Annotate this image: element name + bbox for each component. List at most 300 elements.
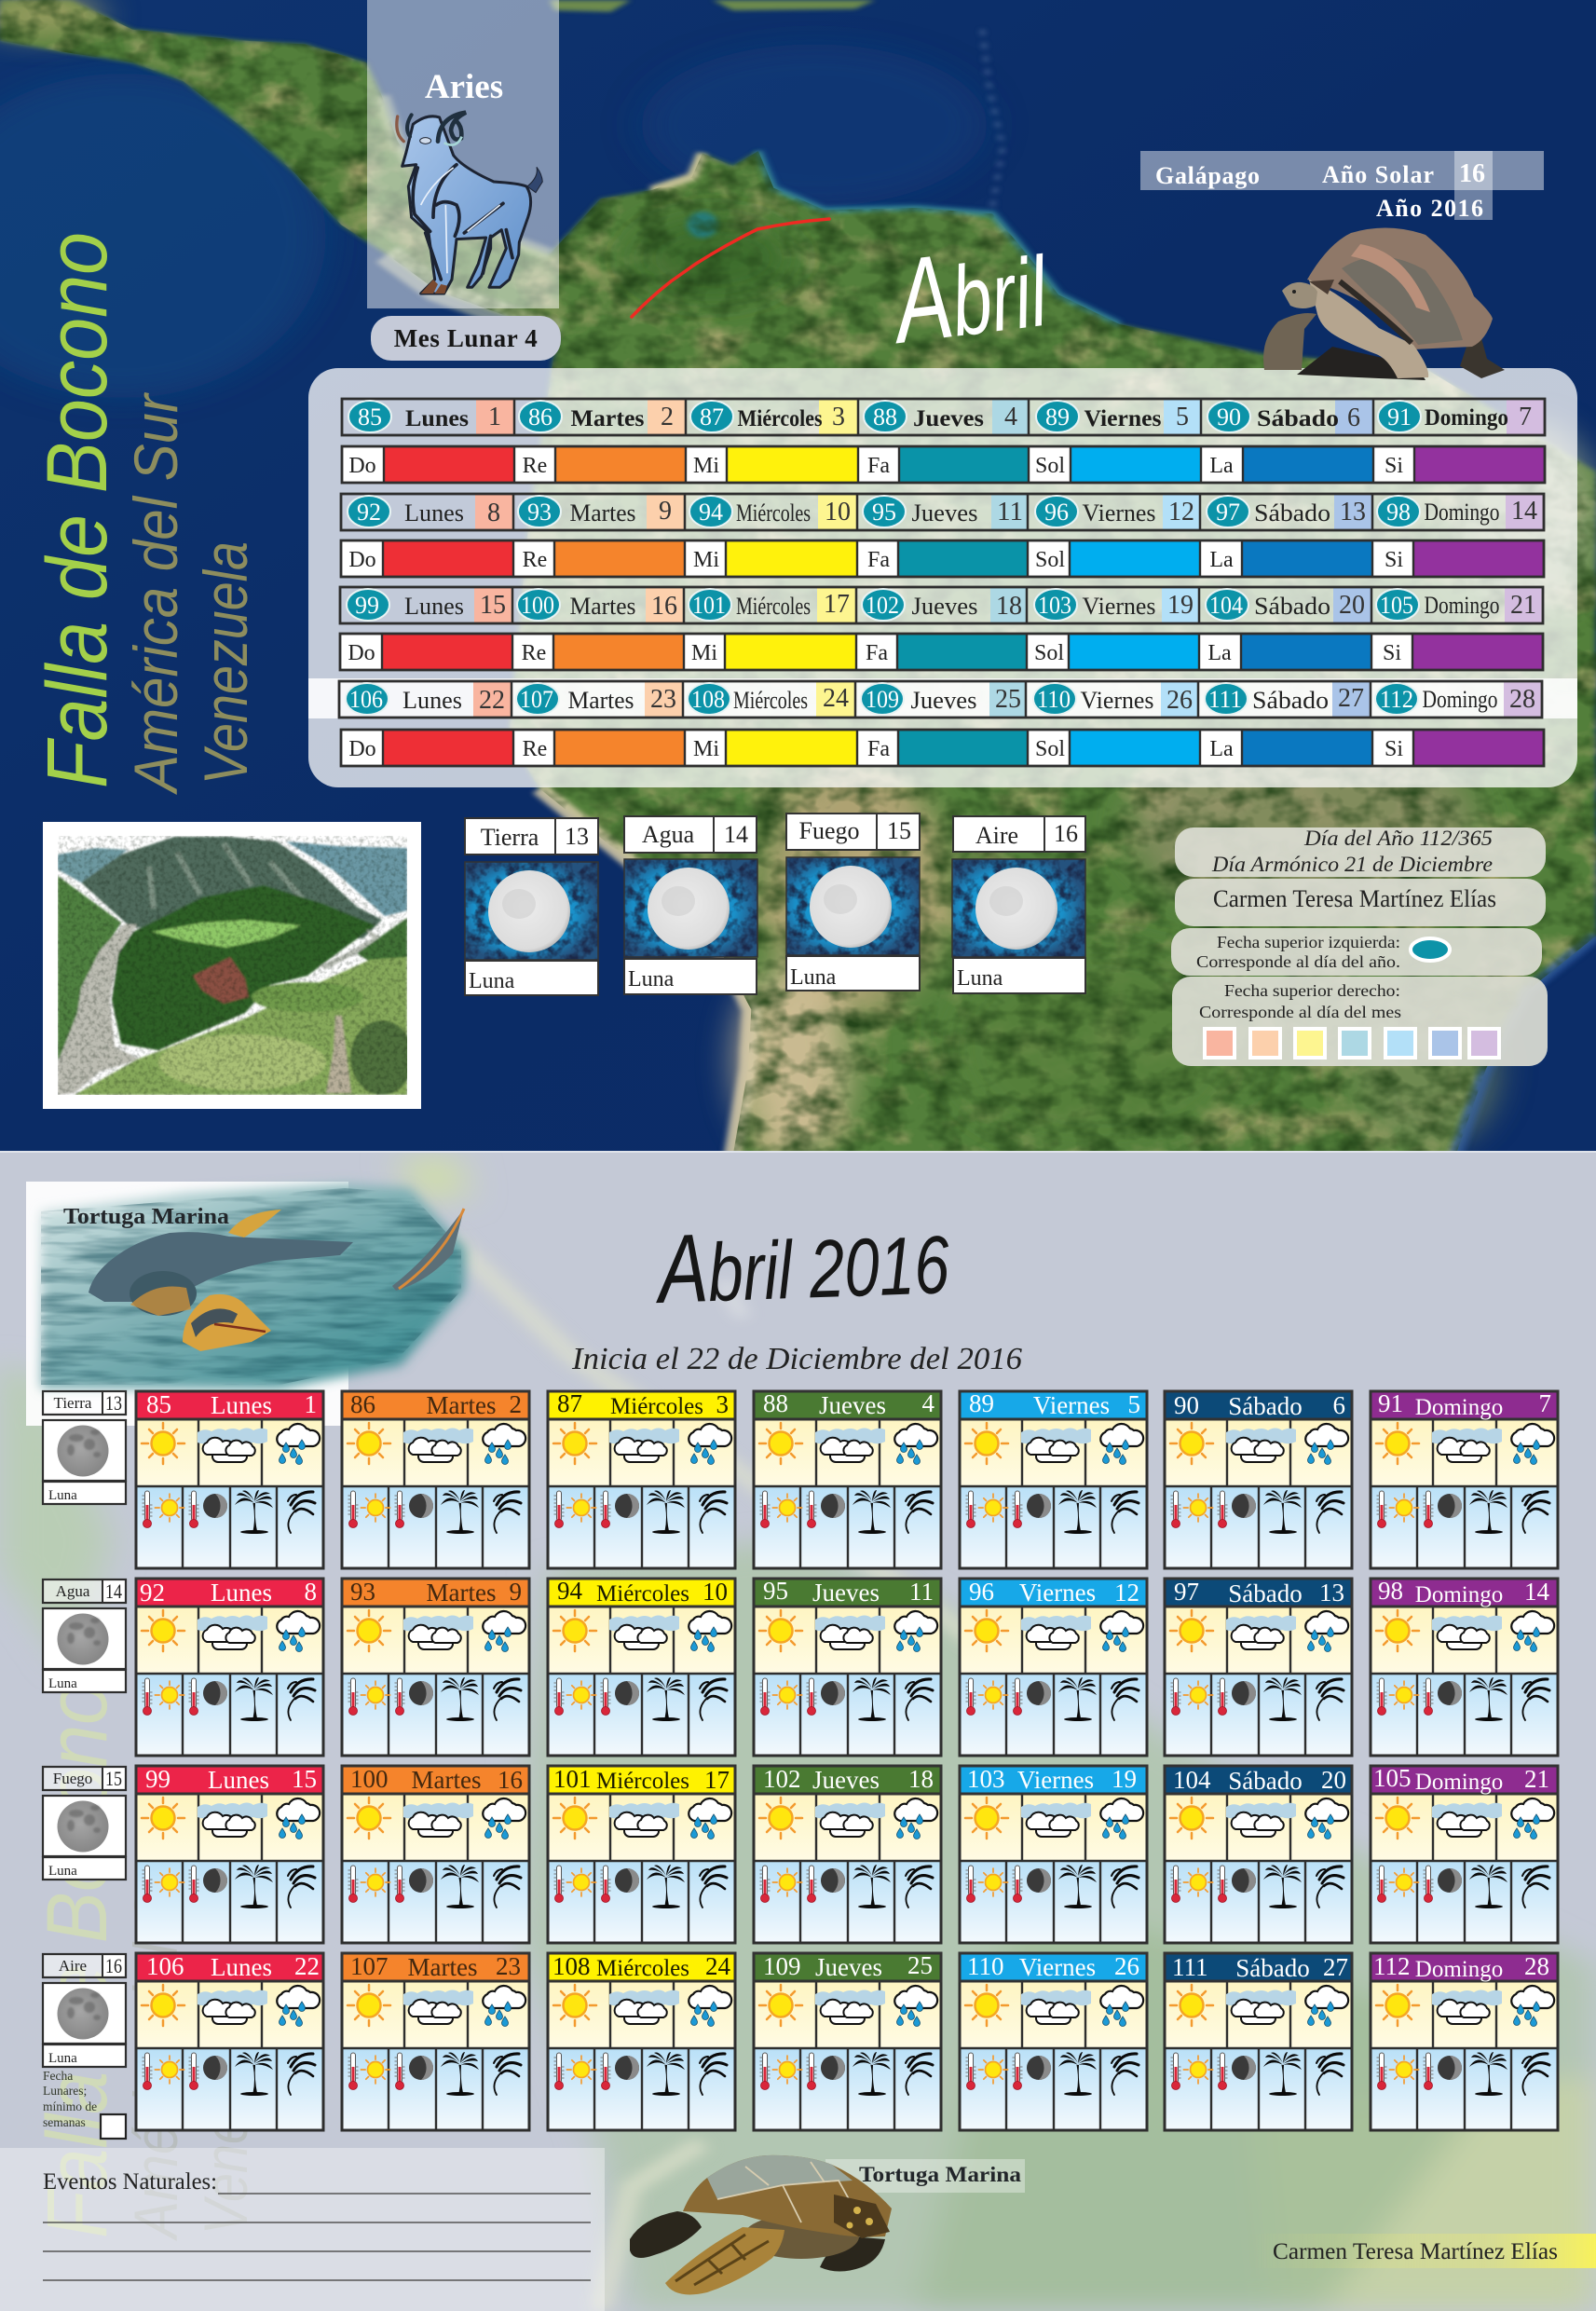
header: 112 Domingo 28: 112 bbox=[1373, 1952, 1411, 1980]
day card 91 bbox=[1371, 1389, 1558, 1568]
header: 101 Miércoles 17: Miércoles bbox=[596, 1769, 689, 1794]
week 1 date row: 91 bbox=[1387, 403, 1412, 431]
header: 105 Domingo 21: Domingo bbox=[1415, 1770, 1503, 1795]
header: 112 Domingo 28: Domingo bbox=[1415, 1957, 1503, 1982]
day card 103 bbox=[960, 1765, 1147, 1943]
week 3 note bars: Fa bbox=[866, 641, 888, 665]
day card 94 bbox=[548, 1577, 735, 1756]
moon card: Tierra 13: Tierra bbox=[481, 824, 539, 851]
header: 103 Viernes 19: Viernes bbox=[1017, 1766, 1094, 1794]
week 1 note bars: Si bbox=[1385, 454, 1403, 478]
week 3 date row: Sábado bbox=[1254, 593, 1330, 620]
moon card: Fuego 15: Luna bbox=[790, 965, 837, 990]
header: 96 Viernes 12: Viernes bbox=[1019, 1579, 1096, 1607]
week 3 date row: 99 bbox=[355, 592, 379, 619]
week 4 note bars: Sol bbox=[1035, 737, 1065, 761]
week 1 date row: Miércoles bbox=[738, 406, 823, 431]
week 2 date row: 11 bbox=[997, 498, 1023, 526]
week 2 note bars: Mi bbox=[693, 548, 719, 572]
week 2 note bars: Do bbox=[348, 548, 376, 572]
week 3 note bars: La bbox=[1207, 641, 1232, 665]
header: 106 Lunes 22 bbox=[136, 1952, 323, 1981]
week 4 note bars: Re bbox=[523, 737, 547, 761]
icon: Aries ram bbox=[397, 113, 542, 294]
day card 99 bbox=[136, 1765, 323, 1943]
week 1 date row: Jueves bbox=[913, 406, 984, 431]
week 4 note bars: Fa bbox=[867, 737, 890, 761]
week 3 date row: 18 bbox=[996, 592, 1022, 621]
note: Fecha Lunares checkbox: Fecha bbox=[43, 2069, 73, 2083]
header: 85 Lunes 1: 85 bbox=[146, 1390, 171, 1418]
side moon: Agua 14 bbox=[43, 1579, 126, 1692]
info: author name bbox=[1175, 879, 1546, 926]
header: 106 Lunes 22: 22 bbox=[294, 1952, 320, 1980]
moon card: Aire 16 bbox=[952, 816, 1085, 993]
header: 86 Martes 2: Martes bbox=[427, 1391, 496, 1419]
week 1 date row: Sábado bbox=[1257, 406, 1339, 431]
moon card: Agua 14 bbox=[624, 816, 757, 994]
header: 94 Miércoles 10: 94 bbox=[557, 1577, 583, 1605]
week 1 date row: 3 bbox=[832, 403, 845, 431]
week 3 date row: 101 bbox=[692, 592, 726, 619]
week 3 note bars: Si bbox=[1383, 641, 1401, 665]
week 1 date row: 1 bbox=[488, 403, 501, 431]
week 2 date row: 9 bbox=[659, 497, 672, 526]
moon card: Fuego 15: 15 bbox=[887, 817, 911, 844]
day card 97 bbox=[1165, 1578, 1352, 1756]
week 3 date row: 21 bbox=[1510, 591, 1536, 620]
week 2 note bars bbox=[341, 540, 1544, 577]
header: 111 Sábado 27 bbox=[1165, 1953, 1352, 1982]
week 4 date row: 110 bbox=[1037, 686, 1071, 713]
day card 106 bbox=[136, 1952, 323, 2130]
week 1 date row: 90 bbox=[1217, 403, 1241, 431]
moon card: Fuego 15 bbox=[786, 814, 920, 991]
week 4 note bars bbox=[341, 730, 1544, 766]
week 3 date row: 104 bbox=[1209, 592, 1243, 619]
header: 110 Viernes 26: Viernes bbox=[1019, 1953, 1096, 1981]
background: satellite map of the Americas bbox=[0, 0, 1596, 1157]
header: 87 Miércoles 3: 87 bbox=[557, 1389, 582, 1417]
icon: Galapagos giant tortoise bbox=[1263, 227, 1505, 380]
banner: Galápago / Año Solar / Año 2016 bbox=[1140, 151, 1544, 222]
side moon: Tierra 13: 13 bbox=[105, 1391, 122, 1415]
banner: Galápago / Año Solar / Año 2016: Galápago bbox=[1155, 162, 1260, 189]
week 3 date row: 100 bbox=[521, 592, 554, 619]
label: Tortuga Marina box bbox=[825, 2159, 1025, 2193]
week 4 date row bbox=[339, 681, 1542, 718]
note: Fecha Lunares checkbox bbox=[43, 2069, 126, 2139]
week 2 date row: 13 bbox=[1340, 498, 1366, 526]
header: 100 Martes 16: 16 bbox=[498, 1766, 523, 1794]
week 2 date row: Domingo bbox=[1424, 499, 1500, 526]
header: 98 Domingo 14 bbox=[1371, 1577, 1558, 1607]
header: 109 Jueves 25: 25 bbox=[907, 1951, 933, 1979]
week 2 note bars: Fa bbox=[867, 548, 890, 572]
header: 98 Domingo 14: Domingo bbox=[1415, 1582, 1503, 1607]
header: 91 Domingo 7: Domingo bbox=[1415, 1395, 1503, 1420]
label: Mes Lunar 4 bbox=[371, 316, 561, 361]
header: 103 Viernes 19: 103 bbox=[967, 1765, 1004, 1793]
side moon: Aire 16: Luna bbox=[48, 2051, 77, 2066]
side moon: Fuego 15: Fuego bbox=[53, 1770, 92, 1787]
week 2 note bars: Si bbox=[1385, 548, 1403, 572]
day card 89 bbox=[960, 1389, 1147, 1568]
legend: top right date swatches bbox=[1172, 977, 1548, 1066]
week 1 date row: Viernes bbox=[1084, 406, 1162, 431]
header: 109 Jueves 25: Jueves bbox=[815, 1953, 882, 1981]
week 2 date row: Martes bbox=[570, 499, 635, 526]
day card 92 bbox=[136, 1578, 323, 1756]
header: 106 Lunes 22: Lunes bbox=[211, 1953, 272, 1981]
header: 85 Lunes 1: 1 bbox=[304, 1390, 317, 1418]
banner: Galápago / Año Solar / Año 2016: Año Solar bbox=[1322, 161, 1434, 188]
week 4 date row: 112 bbox=[1380, 686, 1413, 713]
header: 109 Jueves 25: 109 bbox=[763, 1952, 801, 1980]
week 1 date row bbox=[342, 399, 1545, 435]
week 1 date row: 86 bbox=[528, 403, 552, 431]
label: Mes Lunar 4: Mes Lunar 4 bbox=[394, 324, 538, 352]
side moon: Agua 14: Agua bbox=[56, 1582, 90, 1600]
header: 98 Domingo 14: 14 bbox=[1524, 1578, 1550, 1606]
day card 108 bbox=[548, 1952, 735, 2130]
week 2 date row: Jueves bbox=[911, 499, 978, 526]
day card 104 bbox=[1165, 1766, 1352, 1943]
header: 89 Viernes 5 bbox=[960, 1389, 1147, 1419]
side moon: Tierra 13: Luna bbox=[48, 1488, 77, 1503]
header: 96 Viernes 12 bbox=[960, 1578, 1147, 1607]
heading: Aries: Aries bbox=[425, 68, 503, 106]
header: 107 Martes 23 bbox=[342, 1952, 529, 1981]
day card 107 bbox=[342, 1952, 529, 2130]
header: 91 Domingo 7: 7 bbox=[1539, 1389, 1551, 1417]
header: 108 Miércoles 24: 24 bbox=[705, 1952, 730, 1980]
info: author name: Carmen Teresa Martínez Elías bbox=[1213, 885, 1496, 912]
moon card: Aire 16: Aire bbox=[975, 822, 1018, 849]
title: Abril 2016: Abril 2016 bbox=[652, 1206, 951, 1324]
info: day of year: Día del Año 112/365 bbox=[1303, 827, 1493, 850]
week 2 date row: 93 bbox=[527, 499, 552, 526]
week 2 date row: 92 bbox=[357, 499, 381, 526]
week 3 date row: 102 bbox=[866, 592, 899, 619]
week 4 date row: 28 bbox=[1509, 685, 1535, 714]
header: 103 Viernes 19: 19 bbox=[1112, 1765, 1137, 1793]
day card 93 bbox=[342, 1578, 529, 1756]
header: 99 Lunes 15: 15 bbox=[292, 1765, 317, 1793]
header: 111 Sábado 27: Sábado bbox=[1235, 1954, 1310, 1982]
header: 104 Sábado 20: Sábado bbox=[1228, 1767, 1303, 1795]
icon: sea turtle bbox=[630, 2155, 892, 2294]
header: 102 Jueves 18: 102 bbox=[763, 1765, 801, 1793]
header: 112 Domingo 28: 28 bbox=[1524, 1952, 1549, 1980]
day card 88 bbox=[754, 1389, 941, 1568]
moon card: Agua 14: 14 bbox=[724, 821, 748, 848]
header: 99 Lunes 15: Lunes bbox=[208, 1766, 269, 1794]
week 2 note bars: La bbox=[1209, 548, 1234, 572]
week 3 date row: Domingo bbox=[1424, 592, 1500, 619]
vertical subtitle: Venezuela: Venezuela bbox=[191, 541, 260, 785]
side moon: Aire 16 bbox=[43, 1954, 126, 2067]
background: faded map of the lower half bbox=[0, 1153, 1596, 2311]
week 4 date row: Miércoles bbox=[733, 687, 808, 714]
header: 99 Lunes 15 bbox=[136, 1765, 323, 1794]
photo: Bocono valley landscape bbox=[43, 822, 421, 1109]
legend: top left date ellipse: Fecha superior izquierda: bbox=[1217, 933, 1400, 951]
moon card: Tierra 13 bbox=[465, 818, 598, 995]
side moon: Fuego 15: Luna bbox=[48, 1864, 77, 1879]
week 3 note bars: Sol bbox=[1034, 641, 1064, 665]
header: 91 Domingo 7 bbox=[1371, 1389, 1558, 1420]
header: 101 Miércoles 17: 17 bbox=[704, 1766, 730, 1794]
panel: monthly calendar table bbox=[308, 368, 1577, 787]
week 3 date row: 16 bbox=[651, 592, 677, 621]
week 3 date row: 20 bbox=[1339, 591, 1365, 620]
header: 106 Lunes 22: 106 bbox=[146, 1952, 184, 1980]
week 3 date row: 15 bbox=[480, 591, 506, 620]
header: 105 Domingo 21: 21 bbox=[1524, 1765, 1549, 1793]
day card 109 bbox=[754, 1951, 941, 2130]
day card 87 bbox=[548, 1389, 735, 1568]
header: 86 Martes 2: 86 bbox=[350, 1390, 375, 1418]
header: 88 Jueves 4: 88 bbox=[763, 1389, 788, 1417]
week 3 date row: Martes bbox=[570, 593, 635, 620]
week 3 date row: 103 bbox=[1038, 592, 1071, 619]
note: Fecha Lunares checkbox: semanas bbox=[43, 2115, 86, 2129]
week 4 date row: Lunes bbox=[402, 687, 462, 714]
week 2 date row: 14 bbox=[1511, 497, 1537, 526]
week 4 date row: 111 bbox=[1208, 686, 1242, 713]
day card 102 bbox=[754, 1765, 941, 1943]
header: 92 Lunes 8: 92 bbox=[140, 1579, 165, 1607]
header: 112 Domingo 28 bbox=[1371, 1952, 1558, 1982]
header: 93 Martes 9: Martes bbox=[427, 1579, 496, 1607]
header: 110 Viernes 26 bbox=[960, 1952, 1147, 1981]
header: 89 Viernes 5: 5 bbox=[1127, 1390, 1140, 1418]
header: 104 Sábado 20: 104 bbox=[1173, 1766, 1211, 1794]
header: 108 Miércoles 24: Miércoles bbox=[596, 1956, 689, 1981]
week 1 date row: 6 bbox=[1347, 403, 1360, 432]
day card 98 bbox=[1371, 1577, 1558, 1756]
side moon: Aire 16: Aire bbox=[59, 1957, 87, 1975]
header: 108 Miércoles 24 bbox=[548, 1952, 735, 1981]
week 4 note bars: Do bbox=[348, 737, 376, 761]
label: Tortuga Marina: Tortuga Marina bbox=[63, 1205, 229, 1229]
week 4 date row: 107 bbox=[520, 686, 553, 713]
week 2 date row: Viernes bbox=[1083, 499, 1155, 526]
header: 86 Martes 2: 2 bbox=[509, 1390, 522, 1418]
header: 110 Viernes 26: 26 bbox=[1114, 1952, 1139, 1980]
header: 104 Sábado 20 bbox=[1165, 1766, 1352, 1795]
week 1 date row: 85 bbox=[358, 403, 382, 431]
banner: Galápago / Año Solar / Año 2016: 16 bbox=[1459, 159, 1485, 188]
header: 90 Sábado 6: 90 bbox=[1174, 1391, 1199, 1419]
header: 111 Sábado 27: 27 bbox=[1323, 1953, 1348, 1981]
moon card: Agua 14: Agua bbox=[642, 821, 695, 848]
note: Fecha Lunares checkbox: Lunares; bbox=[43, 2084, 87, 2098]
week 3 date row: Viernes bbox=[1083, 593, 1155, 620]
header: 89 Viernes 5: 89 bbox=[969, 1389, 994, 1417]
week 3 note bars: Mi bbox=[691, 641, 717, 665]
day card 96 bbox=[960, 1578, 1147, 1756]
side moon: Fuego 15 bbox=[43, 1767, 126, 1880]
week 2 date row: 95 bbox=[872, 499, 896, 526]
week 2 note bars: Sol bbox=[1035, 548, 1065, 572]
panel: Eventos Naturales notes bbox=[0, 2148, 605, 2311]
header: 89 Viernes 5: Viernes bbox=[1033, 1391, 1110, 1419]
week 4 note bars: La bbox=[1209, 737, 1234, 761]
header: 101 Miércoles 17 bbox=[548, 1765, 735, 1794]
week 1 date row: 7 bbox=[1519, 403, 1532, 431]
week 3 date row: Jueves bbox=[911, 593, 978, 620]
side moon: Tierra 13: Tierra bbox=[54, 1394, 92, 1412]
week 1 note bars: Re bbox=[523, 454, 547, 478]
subtitle: start date: Inicia el 22 de Diciembre del 2016 bbox=[571, 1342, 1022, 1376]
banner: Galápago / Año Solar / Año 2016: Año 2016 bbox=[1376, 195, 1483, 222]
vertical title: Falla de Bocono: Falla de Bocono bbox=[30, 232, 125, 788]
moon card: Aire 16: 16 bbox=[1054, 820, 1078, 847]
photo: Tortuga Marina swimming bbox=[26, 1182, 466, 1426]
panel: Aries zodiac sign bbox=[367, 0, 559, 308]
week 2 date row: Lunes bbox=[404, 499, 464, 526]
header: 107 Martes 23: 107 bbox=[350, 1952, 388, 1980]
day card 111 bbox=[1165, 1953, 1352, 2130]
day card 105 bbox=[1371, 1764, 1558, 1943]
week 4 date row: 108 bbox=[691, 686, 725, 713]
week 3 date row bbox=[340, 587, 1543, 623]
week 4 date row: Jueves bbox=[911, 687, 976, 714]
header: 88 Jueves 4 bbox=[754, 1389, 941, 1419]
header: 94 Miércoles 10: 10 bbox=[703, 1578, 728, 1606]
day card 85 bbox=[136, 1390, 323, 1568]
side moon: Aire 16: 16 bbox=[105, 1954, 122, 1977]
header: 97 Sábado 13: 97 bbox=[1174, 1578, 1199, 1606]
header: 95 Jueves 11 bbox=[754, 1577, 941, 1607]
day card 110 bbox=[960, 1952, 1147, 2130]
note: Fecha Lunares checkbox: mínimo de bbox=[43, 2099, 97, 2113]
credit: author highlight bbox=[1248, 2234, 1596, 2268]
vertical subtitle: América del Sur: América del Sur bbox=[121, 391, 190, 796]
week 1 date row: 5 bbox=[1176, 403, 1189, 431]
day card 95 bbox=[754, 1577, 941, 1756]
header: 92 Lunes 8: Lunes bbox=[211, 1579, 272, 1607]
header: 94 Miércoles 10: Miércoles bbox=[596, 1581, 689, 1607]
week 1 note bars: Sol bbox=[1035, 454, 1065, 478]
week 1 date row: Domingo bbox=[1425, 405, 1508, 431]
ghost title: Falla de Bocono: Falla de Bocono bbox=[30, 1682, 125, 2238]
week 4 date row: 27 bbox=[1338, 684, 1364, 713]
label: Tortuga Marina box: Tortuga Marina bbox=[859, 2163, 1022, 2186]
week 2 date row: 8 bbox=[487, 499, 500, 527]
header: 110 Viernes 26: 110 bbox=[967, 1952, 1004, 1980]
week 4 date row: Viernes bbox=[1081, 687, 1153, 714]
header: 100 Martes 16: Martes bbox=[412, 1766, 481, 1794]
header: 102 Jueves 18 bbox=[754, 1765, 941, 1794]
header: 88 Jueves 4: Jueves bbox=[819, 1391, 886, 1419]
legend: top right date swatches: Fecha superior derecho: bbox=[1224, 981, 1400, 1000]
week 2 date row: 12 bbox=[1168, 498, 1194, 526]
header: 98 Domingo 14: 98 bbox=[1378, 1577, 1403, 1605]
day card 112 bbox=[1371, 1952, 1558, 2130]
credit: author highlight: Carmen Teresa Martínez Elías bbox=[1273, 2239, 1558, 2264]
header: 105 Domingo 21 bbox=[1371, 1764, 1558, 1795]
ghost subtitle: América del Sur: América del Sur bbox=[121, 1838, 190, 2242]
week 3 note bars: Do bbox=[348, 641, 375, 665]
header: 92 Lunes 8: 8 bbox=[304, 1578, 317, 1606]
day card 100 bbox=[342, 1765, 529, 1943]
week 2 note bars: Re bbox=[523, 548, 547, 572]
week 4 date row: 106 bbox=[349, 686, 383, 713]
header: 87 Miércoles 3: 3 bbox=[716, 1390, 729, 1418]
week 1 date row: 88 bbox=[873, 403, 897, 431]
week 3 date row: Lunes bbox=[404, 593, 464, 620]
header: 91 Domingo 7: 91 bbox=[1378, 1389, 1403, 1417]
moon card: Tierra 13: Luna bbox=[469, 969, 515, 993]
week 4 date row: 25 bbox=[995, 685, 1021, 714]
week 3 date row: 105 bbox=[1380, 592, 1413, 619]
header: 86 Martes 2 bbox=[342, 1390, 529, 1419]
moon card: Fuego 15: Fuego bbox=[799, 817, 859, 844]
week 3 note bars: Re bbox=[522, 641, 546, 665]
week 1 date row: 2 bbox=[661, 403, 674, 431]
header: 90 Sábado 6: Sábado bbox=[1228, 1392, 1303, 1420]
header: 90 Sábado 6: 6 bbox=[1332, 1391, 1345, 1419]
side moon: Agua 14: Luna bbox=[48, 1676, 77, 1691]
header: 85 Lunes 1 bbox=[136, 1390, 323, 1419]
header: 102 Jueves 18: 18 bbox=[908, 1765, 934, 1793]
moon card: Aire 16: Luna bbox=[957, 966, 1003, 991]
moon card: Tierra 13: 13 bbox=[565, 823, 589, 850]
week 4 note bars: Mi bbox=[693, 737, 719, 761]
header: 92 Lunes 8 bbox=[136, 1578, 323, 1607]
week 2 date row: 96 bbox=[1044, 499, 1069, 526]
header: 107 Martes 23: 23 bbox=[496, 1952, 521, 1980]
header: 93 Martes 9: 93 bbox=[350, 1578, 375, 1606]
header: 95 Jueves 11: Jueves bbox=[812, 1579, 880, 1607]
header: 90 Sábado 6 bbox=[1165, 1391, 1352, 1420]
week 4 date row: Sábado bbox=[1252, 687, 1329, 714]
week 4 date row: 24 bbox=[823, 684, 849, 713]
legend: top right date swatches: Corresponde al día del mes bbox=[1199, 1003, 1401, 1021]
header: 108 Miércoles 24: 108 bbox=[552, 1952, 591, 1980]
week 3 date row: 19 bbox=[1167, 591, 1194, 620]
header: 93 Martes 9 bbox=[342, 1578, 529, 1607]
week 2 date row: Sábado bbox=[1254, 499, 1330, 526]
header: 105 Domingo 21: 105 bbox=[1373, 1764, 1411, 1792]
header: 85 Lunes 1: Lunes bbox=[211, 1391, 272, 1419]
legend: top left date ellipse: Corresponde al día del año. bbox=[1196, 952, 1400, 971]
week 1 note bars: Do bbox=[348, 454, 376, 478]
week 2 date row: 97 bbox=[1216, 499, 1240, 526]
side moon: Fuego 15: 15 bbox=[105, 1767, 122, 1790]
header: 109 Jueves 25 bbox=[754, 1951, 941, 1981]
week 4 date row: 22 bbox=[479, 686, 505, 715]
week 1 note bars bbox=[342, 446, 1545, 483]
week 1 note bars: La bbox=[1209, 454, 1234, 478]
header: 107 Martes 23: Martes bbox=[408, 1953, 477, 1981]
header: 96 Viernes 12: 12 bbox=[1114, 1579, 1139, 1607]
week 4 date row: 109 bbox=[866, 686, 899, 713]
header: 95 Jueves 11: 95 bbox=[763, 1577, 788, 1605]
ghost subtitle: Venezuela: Venezuela bbox=[191, 1991, 260, 2235]
week 4 date row: 23 bbox=[650, 685, 676, 714]
week 3 note bars bbox=[340, 634, 1543, 670]
info: day of year bbox=[1175, 827, 1546, 877]
header: 97 Sábado 13: Sábado bbox=[1228, 1579, 1303, 1607]
side moon: Agua 14: 14 bbox=[105, 1579, 122, 1603]
header: 88 Jueves 4: 4 bbox=[922, 1389, 935, 1417]
header: 111 Sábado 27: 111 bbox=[1172, 1953, 1207, 1981]
header: 97 Sábado 13 bbox=[1165, 1578, 1352, 1607]
